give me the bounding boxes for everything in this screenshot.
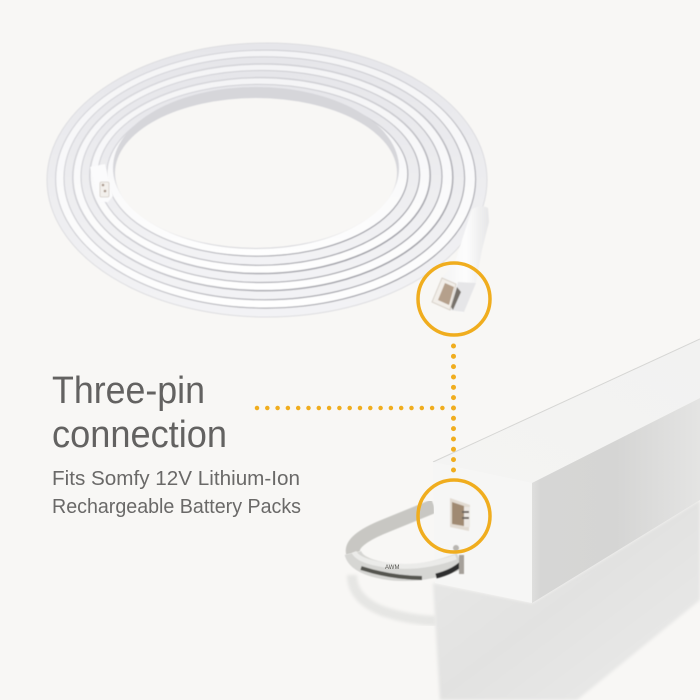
box top face xyxy=(433,339,700,483)
subheading xyxy=(52,468,301,518)
horizontal dotted connector xyxy=(257,406,446,410)
box side face xyxy=(532,398,700,603)
callout circle: box port xyxy=(418,480,490,552)
wire loop reflection xyxy=(352,575,436,621)
subheading: Rechargeable Battery Packs xyxy=(52,496,301,518)
cable coil xyxy=(47,43,487,317)
cable print: AWM xyxy=(385,565,399,571)
motor box xyxy=(433,339,700,603)
wire loop rear section xyxy=(353,506,434,553)
heading: Three-pin xyxy=(52,370,205,412)
vertical dotted connector xyxy=(451,346,456,471)
wire loop front section xyxy=(353,545,464,578)
box front face xyxy=(433,462,532,603)
box rear edge xyxy=(433,339,700,462)
heading xyxy=(52,370,227,456)
motor box reflection xyxy=(433,500,700,700)
box port xyxy=(450,498,470,531)
large connector plug xyxy=(432,206,489,313)
small connector on coil end xyxy=(90,164,113,202)
heading: connection xyxy=(52,414,227,456)
callout circle: cable connector xyxy=(418,263,490,335)
subheading: Fits Somfy 12V Lithium-Ion xyxy=(52,468,300,490)
